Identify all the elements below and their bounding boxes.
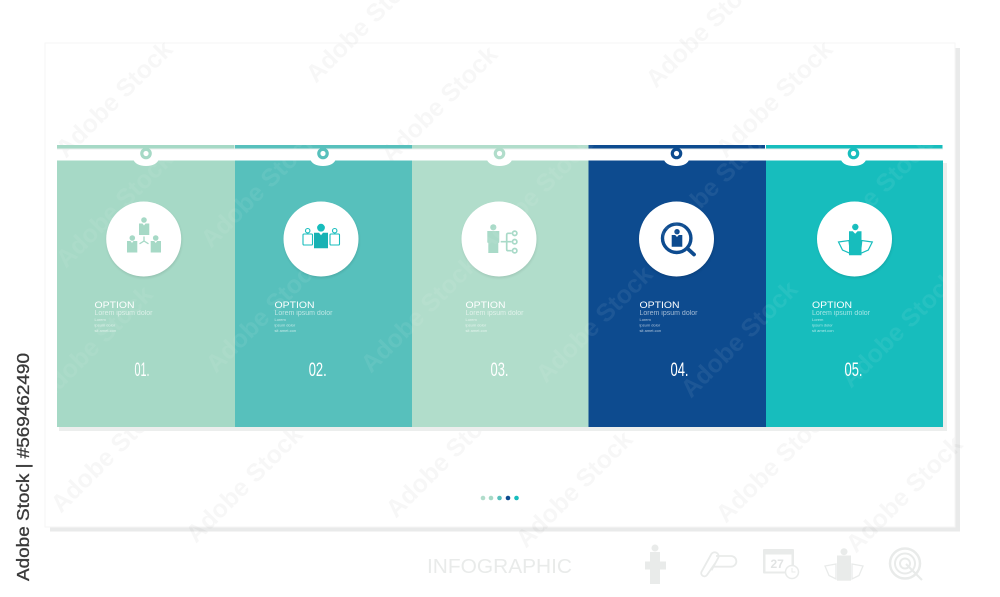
option text 4: Lorem ipsum dolor (640, 310, 698, 317)
option text 3: OPTION (466, 300, 506, 311)
panel 4 (588, 145, 766, 427)
icon: person with folders (825, 548, 863, 581)
watermark over panels: Adobe Stock (50, 145, 178, 273)
panel 5 (766, 145, 943, 427)
option text 2 (274, 300, 333, 333)
option text 3: sit amet.con (466, 328, 487, 333)
circle 3 (462, 202, 537, 278)
watermark over panels: Adobe Stock (355, 250, 483, 378)
icon: person with folders (838, 224, 872, 255)
panel 1 (57, 145, 235, 427)
option text 4: Lorem (640, 317, 652, 322)
watermark on white background: Adobe Stock (840, 430, 968, 558)
number 03: 03. (490, 359, 508, 381)
option text 2: Lorem (274, 317, 287, 322)
card frame with shadow (45, 43, 960, 532)
icon: person (645, 544, 666, 584)
option text 2: Lorem ipsum dolor (274, 310, 333, 317)
option text 3: Lorem ipsum dolor (466, 310, 524, 317)
option text 5: OPTION (812, 300, 852, 311)
icon: target (890, 548, 922, 580)
watermark on white background: Adobe Stock (380, 395, 508, 523)
option text 1: ipsum dolor (94, 322, 116, 328)
watermark over panels: Adobe Stock (195, 125, 323, 253)
icon: person with options (487, 224, 517, 253)
panel shadow (59, 427, 947, 431)
option text 3: Lorem (466, 317, 478, 322)
watermark on white background: Adobe Stock (710, 35, 838, 163)
option text 2: sit amet.con (274, 328, 296, 333)
icon: team lead (303, 224, 340, 248)
option text 4: sit amet.con (640, 328, 661, 333)
option text 5: Lorem (812, 317, 824, 322)
watermark over panels: Adobe Stock (835, 265, 963, 393)
option text 4: ipsum dolor (640, 322, 661, 328)
option text 1: OPTION (94, 300, 135, 311)
option text 2: ipsum dolor (274, 322, 296, 328)
option text 4 (640, 300, 698, 333)
infographic label: INFOGRAPHIC (427, 555, 572, 578)
watermark on white background: Adobe Stock (50, 35, 178, 163)
circle 4 (639, 202, 714, 278)
panel 2 (235, 145, 412, 427)
watermark over panels: Adobe Stock (650, 120, 778, 248)
circle 2 (284, 202, 359, 278)
watermark over panels: Adobe Stock (810, 130, 938, 258)
watermark on white background: Adobe Stock (510, 425, 638, 553)
icon: team hierarchy (127, 217, 161, 252)
option text 3: ipsum dolor (466, 322, 487, 328)
tab 2 (310, 148, 336, 166)
number 05: 05. (844, 359, 862, 381)
watermark over panels: Adobe Stock (200, 250, 328, 378)
number 04: 04. (670, 359, 688, 381)
icon: calendar (763, 549, 798, 578)
tab 4 (664, 148, 689, 166)
stock id: Adobe Stock | #569462490 (13, 353, 33, 581)
option text 2: OPTION (274, 300, 315, 311)
option text 1: Lorem ipsum dolor (94, 310, 153, 317)
tab 1 (134, 148, 158, 166)
tab 3 (487, 148, 512, 166)
circle 1 (106, 202, 182, 278)
icon: magnifier with person (662, 224, 694, 254)
watermark over panels: Adobe Stock (470, 130, 598, 258)
icon row (645, 544, 922, 584)
bar 5 (766, 145, 942, 148)
option text 5: sit amet.con (812, 328, 834, 333)
option text 5: Lorem ipsum dolor (812, 310, 871, 317)
watermark over panels: Adobe Stock (675, 275, 803, 403)
pagination dots (481, 496, 519, 500)
option text 5 (812, 300, 871, 333)
bar 3 (412, 145, 588, 148)
panel 3 (412, 145, 588, 427)
bar 2 (235, 145, 412, 148)
bar 1 (57, 145, 234, 148)
circle 5 (817, 202, 892, 278)
number 01: 01. (134, 359, 150, 381)
top bar shadow (57, 148, 943, 150)
watermark on white background: Adobe Stock (180, 420, 308, 548)
watermark on white background: Adobe Stock (375, 40, 503, 168)
watermark over panels: Adobe Stock (30, 280, 158, 408)
watermark over panels (30, 120, 963, 408)
bar 4 (588, 145, 765, 148)
option text 1 (94, 300, 153, 333)
watermark on white background: Adobe Stock (710, 400, 838, 528)
number 02: 02. (309, 359, 327, 381)
option text 4: OPTION (640, 300, 680, 311)
watermark on white background: Adobe Stock (45, 390, 173, 518)
icon: calendar: 27 (770, 557, 784, 571)
icon: paperclip (701, 552, 736, 576)
option text 1: sit amet.con (94, 328, 116, 333)
watermark over panels: Adobe Stock (530, 260, 658, 388)
option text 5: ipsum dolor (812, 322, 833, 328)
option text 1: Lorem (94, 317, 107, 322)
option text 3 (466, 300, 524, 333)
tab 5 (841, 148, 866, 166)
right shadow (943, 163, 947, 431)
